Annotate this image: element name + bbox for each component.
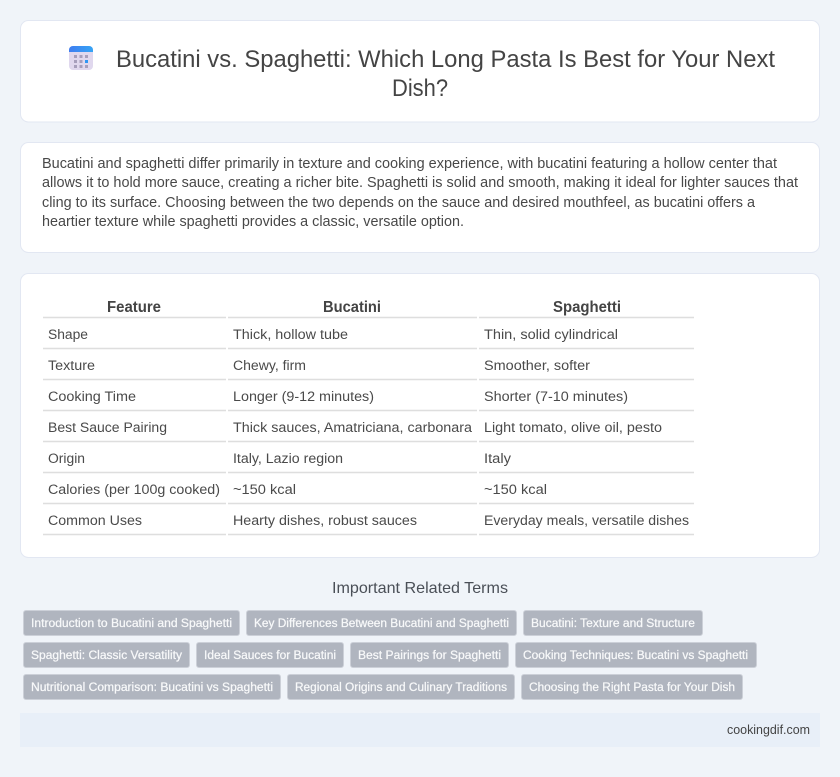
- row: shape: Thin, solid cylindrical: [484, 327, 618, 343]
- row: common uses: [48, 513, 689, 529]
- row: best sauce pairing: [48, 420, 662, 436]
- text block: introduction: Bucatini and spaghetti differ primarily in texture and cooking experience, with bucatini featuring a hollow center that: [42, 156, 777, 172]
- panel: header: [20, 20, 820, 122]
- table header: Bucatini: [323, 299, 381, 316]
- icon: calendar: [69, 46, 93, 70]
- row: origin: Italy: [484, 451, 512, 467]
- row: calories: Calories (per 100g cooked): [48, 482, 220, 498]
- related term tags: Cooking Techniques: Bucatini vs Spaghetti: [523, 648, 748, 662]
- title: [116, 46, 775, 102]
- text block: introduction: heartier texture while spaghetti provides a classic, versatile option.: [42, 214, 464, 230]
- row: shape: Thick, hollow tube: [233, 327, 348, 343]
- panel: introduction: [20, 142, 820, 252]
- related term tags: Ideal Sauces for Bucatini: [204, 648, 336, 662]
- title: Bucatini vs. Spaghetti: Which Long Pasta Is Best for Your Next: [116, 46, 775, 73]
- title: Dish?: [392, 75, 448, 102]
- row: best sauce pairing: Best Sauce Pairing: [48, 420, 167, 436]
- row: shape: Shape: [48, 327, 88, 343]
- row: calories: ~150 kcal: [233, 482, 296, 498]
- related term tags: Nutritional Comparison: Bucatini vs Spaghetti: [31, 680, 273, 694]
- footer: [20, 713, 820, 747]
- related term tags: Key Differences Between Bucatini and Spaghetti: [254, 616, 509, 630]
- row: origin: Origin: [48, 451, 85, 467]
- row: best sauce pairing: Thick sauces, Amatriciana, carbonara: [233, 420, 472, 436]
- row: origin: Italy, Lazio region: [233, 451, 343, 467]
- heading: related terms: Important Related Terms: [332, 580, 508, 597]
- table header: Spaghetti: [553, 299, 621, 316]
- row: common uses: Everyday meals, versatile dishes: [484, 513, 689, 529]
- row: cooking time: [48, 389, 628, 405]
- panel: comparison table: [20, 274, 820, 558]
- row: common uses: Common Uses: [48, 513, 142, 529]
- related term tags: [24, 610, 756, 700]
- table header: [107, 299, 621, 316]
- text block: introduction: allows it to hold more sauce, creating a richer bite. Spaghetti is solid and smooth, making it ideal for lighter sauces that: [42, 175, 798, 191]
- row: calories: ~150 kcal: [484, 482, 547, 498]
- related term tags: Choosing the Right Pasta for Your Dish: [529, 680, 735, 694]
- table header: Feature: [107, 299, 161, 316]
- row: texture: [48, 358, 590, 374]
- row: best sauce pairing: Light tomato, olive oil, pesto: [484, 420, 662, 436]
- row: texture: Texture: [48, 358, 95, 374]
- row: texture: Chewy, firm: [233, 358, 306, 374]
- row: cooking time: Longer (9-12 minutes): [233, 389, 374, 405]
- related term tags: Best Pairings for Spaghetti: [358, 648, 501, 662]
- footer: cookingdif.com: [727, 723, 810, 737]
- text block: introduction: [42, 156, 798, 230]
- related term tags: Spaghetti: Classic Versatility: [31, 648, 183, 662]
- row: cooking time: Shorter (7-10 minutes): [484, 389, 628, 405]
- related term tags: Introduction to Bucatini and Spaghetti: [31, 616, 232, 630]
- related term tags: Bucatini: Texture and Structure: [531, 616, 695, 630]
- row: common uses: Hearty dishes, robust sauces: [233, 513, 417, 529]
- text block: introduction: cling to its surface. Choosing between the two depends on the sauce and desired mouthfeel, as bucatini offers a: [42, 195, 756, 211]
- row: cooking time: Cooking Time: [48, 389, 136, 405]
- row: origin: [48, 451, 512, 467]
- row: shape: [48, 327, 618, 343]
- row: texture: Smoother, softer: [484, 358, 590, 374]
- related term tags: Regional Origins and Culinary Traditions: [295, 680, 507, 694]
- row: calories: [48, 482, 547, 498]
